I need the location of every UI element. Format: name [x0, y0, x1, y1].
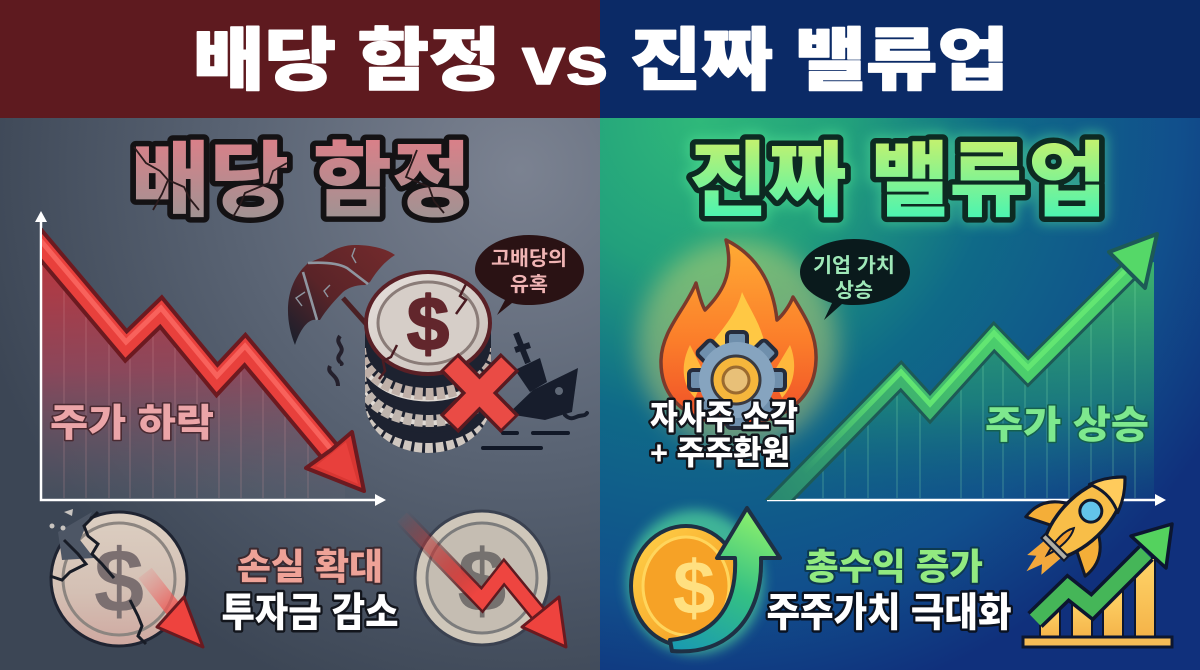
icon: cracked coin with down arrow — [50, 509, 203, 647]
rocket flame — [1019, 539, 1061, 582]
rocket nose — [1089, 463, 1139, 513]
icon: coin stack — [360, 272, 496, 460]
icon: dull coin with down arrow: $ — [458, 531, 506, 630]
icon: dull coin with down arrow — [402, 511, 566, 647]
rocket fins — [1026, 488, 1114, 576]
flame — [661, 240, 816, 425]
rocket window — [1075, 496, 1106, 527]
icon: red X — [449, 362, 510, 424]
header band: right — [600, 0, 1200, 118]
panel: dividend trap background — [0, 118, 600, 670]
axis arrowheads — [35, 211, 386, 506]
label: stock price falls: 주가 하락 — [50, 403, 214, 445]
label: maximize shareholder value: 주주가치 극대화 — [766, 591, 1012, 635]
label: widening losses: 손실 확대 — [237, 546, 383, 587]
speech bubble: high dividend temptation: 고배당의 — [491, 247, 567, 270]
rocket centre fin — [1044, 525, 1077, 558]
label: stock price rises: 주가 상승 — [985, 405, 1149, 447]
icon: gold coin with up arrow — [627, 508, 780, 654]
icon: gold coin with up arrow: $ — [673, 546, 715, 631]
speech bubble: high dividend temptation — [475, 235, 584, 315]
main title: 배당 함정 vs 진짜 밸류업 — [193, 23, 1009, 99]
chart: falling stock price — [30, 211, 386, 506]
icon: bar chart with up arrow — [1023, 524, 1172, 647]
header band: left — [0, 0, 600, 118]
rising arrow — [770, 266, 1132, 510]
speech bubble: corporate value rises: 상승 — [835, 279, 873, 302]
icon: flame with gear — [638, 240, 838, 450]
label: total return grows: 총수익 증가 — [805, 546, 983, 587]
x axis arrowhead — [1155, 494, 1166, 506]
gear — [689, 332, 785, 428]
label: shareholder return: + 주주환원 — [650, 434, 790, 471]
falling arrow — [30, 228, 364, 491]
speech bubble: corporate value rises — [800, 239, 910, 320]
icon: sinking ship — [483, 333, 587, 448]
chart: rising stock price — [767, 234, 1166, 510]
speech bubble: high dividend temptation: 유혹 — [510, 273, 548, 296]
speech bubble: corporate value rises: 기업 가치 — [813, 254, 895, 277]
heading: true value-up: 진짜 밸류업 — [689, 136, 1107, 227]
icon: rocket — [999, 447, 1155, 603]
axis lines — [41, 220, 376, 500]
label: buyback cancellation: 자사주 소각 — [650, 399, 798, 437]
heading: dividend trap: 배당 함정 — [131, 136, 471, 227]
label: shrinking capital: 투자금 감소 — [222, 591, 398, 635]
rocket body — [1040, 462, 1140, 562]
dollar sign: $ — [407, 282, 449, 367]
icon: broken umbrella — [288, 245, 395, 386]
heading: true value-up: 진짜 밸류업 — [689, 136, 1107, 227]
panel: true value-up background — [600, 118, 1200, 670]
icon: cracked coin with down arrow: $ — [94, 532, 144, 632]
x axis — [767, 499, 1156, 501]
